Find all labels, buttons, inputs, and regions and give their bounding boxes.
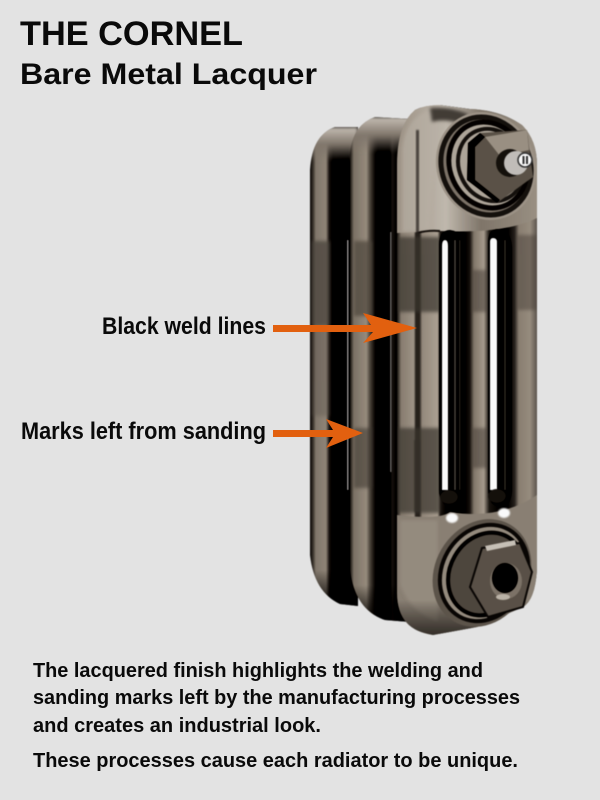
arrow: black weld lines <box>273 313 417 343</box>
middle column <box>350 117 410 622</box>
sanding bands <box>398 237 440 312</box>
slots <box>442 240 448 490</box>
label: black weld lines: Black weld lines <box>102 313 266 340</box>
description text <box>33 659 520 772</box>
top valve boss <box>418 95 554 237</box>
title: THE CORNEL <box>20 15 243 53</box>
top casting <box>397 105 537 233</box>
description text: These processes cause each radiator to be unique. <box>33 749 518 772</box>
bottom casting <box>397 495 537 635</box>
slot surrounds <box>438 229 456 496</box>
description text: sanding marks left by the manufacturing processes <box>33 686 520 709</box>
arrow: marks left from sanding <box>273 419 363 448</box>
subtitle: Bare Metal Lacquer <box>20 58 317 91</box>
front column <box>397 105 537 635</box>
description text: The lacquered finish highlights the welding and <box>33 659 483 682</box>
bottom valve boss <box>413 501 551 645</box>
description text: and creates an industrial look. <box>33 714 321 737</box>
radiator photo illustration <box>310 95 554 645</box>
weld highlights <box>446 513 458 523</box>
back column <box>310 127 358 607</box>
label: marks left from sanding: Marks left from sanding <box>21 418 266 445</box>
